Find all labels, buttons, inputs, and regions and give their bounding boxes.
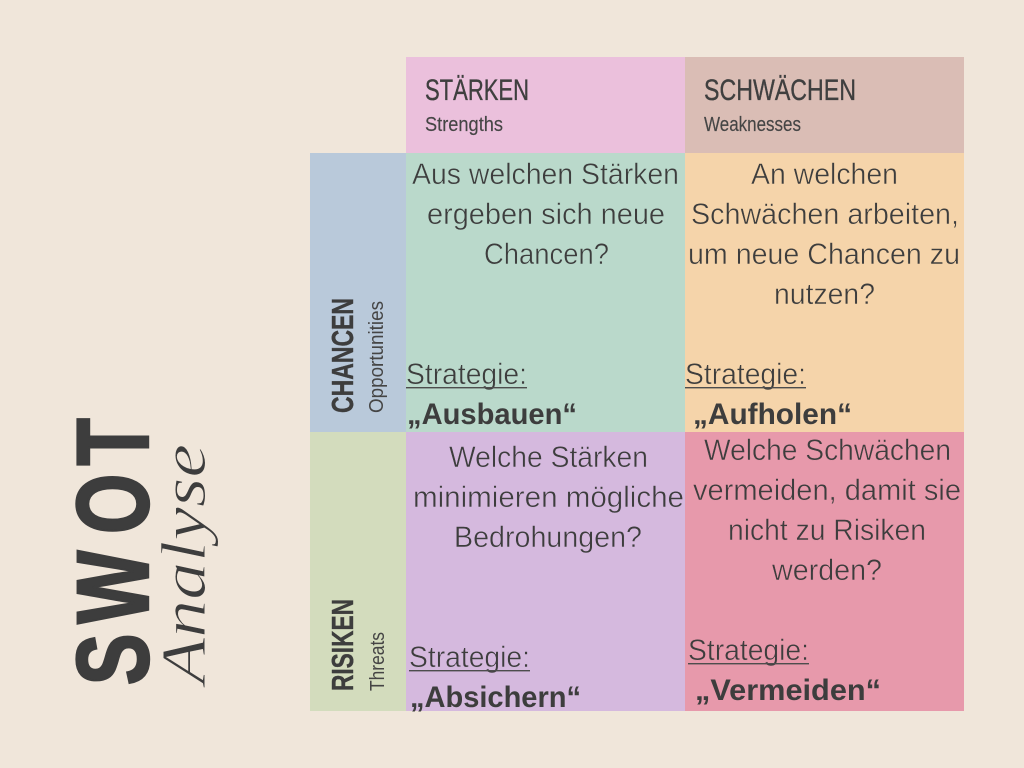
panel: Stärken und Risiken: Welche Stärken: [449, 441, 648, 474]
row header: Chancen: Opportunities: [366, 301, 388, 413]
column header: Schwächen: SCHWÄCHEN: [704, 74, 856, 107]
panel: Schwächen und Risiken: nicht zu Risiken: [728, 514, 926, 547]
panel: Schwächen und Risiken: Strategie:: [688, 634, 809, 667]
column header: Stärken: Strengths: [425, 114, 503, 136]
panel: Stärken und Chancen: [406, 153, 685, 432]
panel: Schwächen und Risiken: „Vermeiden“: [695, 674, 881, 707]
row header: Risiken: Threats: [367, 632, 389, 691]
column header: Schwächen: [685, 57, 964, 153]
column header: Stärken: [406, 57, 685, 153]
panel: Stärken und Chancen: Strategie:: [406, 358, 527, 391]
panel: Schwächen und Risiken: [685, 432, 964, 711]
row header: Chancen: [310, 153, 406, 432]
title: SWOT: SWOT: [57, 418, 171, 685]
panel: Stärken und Risiken: [406, 432, 685, 714]
panel: Stärken und Chancen: Chancen?: [484, 238, 609, 271]
panel: Stärken und Risiken: „Absichern“: [410, 681, 581, 714]
panel: Stärken und Chancen: Aus welchen Stärken: [412, 158, 679, 191]
panel: Schwächen und Chancen: An welchen: [751, 158, 898, 191]
panel: Stärken und Risiken: Bedrohungen?: [454, 521, 642, 554]
panel: Schwächen und Risiken: vermeiden, damit sie: [693, 474, 961, 507]
panel: Stärken und Risiken: Strategie:: [409, 641, 530, 674]
panel: Stärken und Risiken: minimieren mögliche: [413, 481, 684, 514]
panel: Schwächen und Chancen: „Aufholen“: [693, 398, 852, 431]
column header: Schwächen: Weaknesses: [704, 114, 801, 136]
panel: Stärken und Chancen: „Ausbauen“: [407, 398, 577, 431]
panel: Schwächen und Chancen: um neue Chancen zu: [688, 238, 960, 271]
panel: Schwächen und Chancen: Strategie:: [685, 358, 806, 391]
row header: Chancen: CHANCEN: [325, 298, 360, 413]
subtitle: Analyse script: Analyse: [148, 444, 219, 689]
panel: Stärken und Chancen: ergeben sich neue: [427, 198, 665, 231]
panel: Schwächen und Chancen: Schwächen arbeiten,: [691, 198, 959, 231]
panel: Schwächen und Risiken: werden?: [771, 554, 882, 587]
panel: Schwächen und Risiken: Welche Schwächen: [704, 434, 951, 467]
row header: Risiken: RISIKEN: [325, 599, 360, 691]
row header: Risiken: [310, 432, 406, 711]
panel: Schwächen und Chancen: [685, 153, 964, 432]
column header: Stärken: STÄRKEN: [425, 74, 529, 107]
panel: Schwächen und Chancen: nutzen?: [774, 278, 875, 311]
